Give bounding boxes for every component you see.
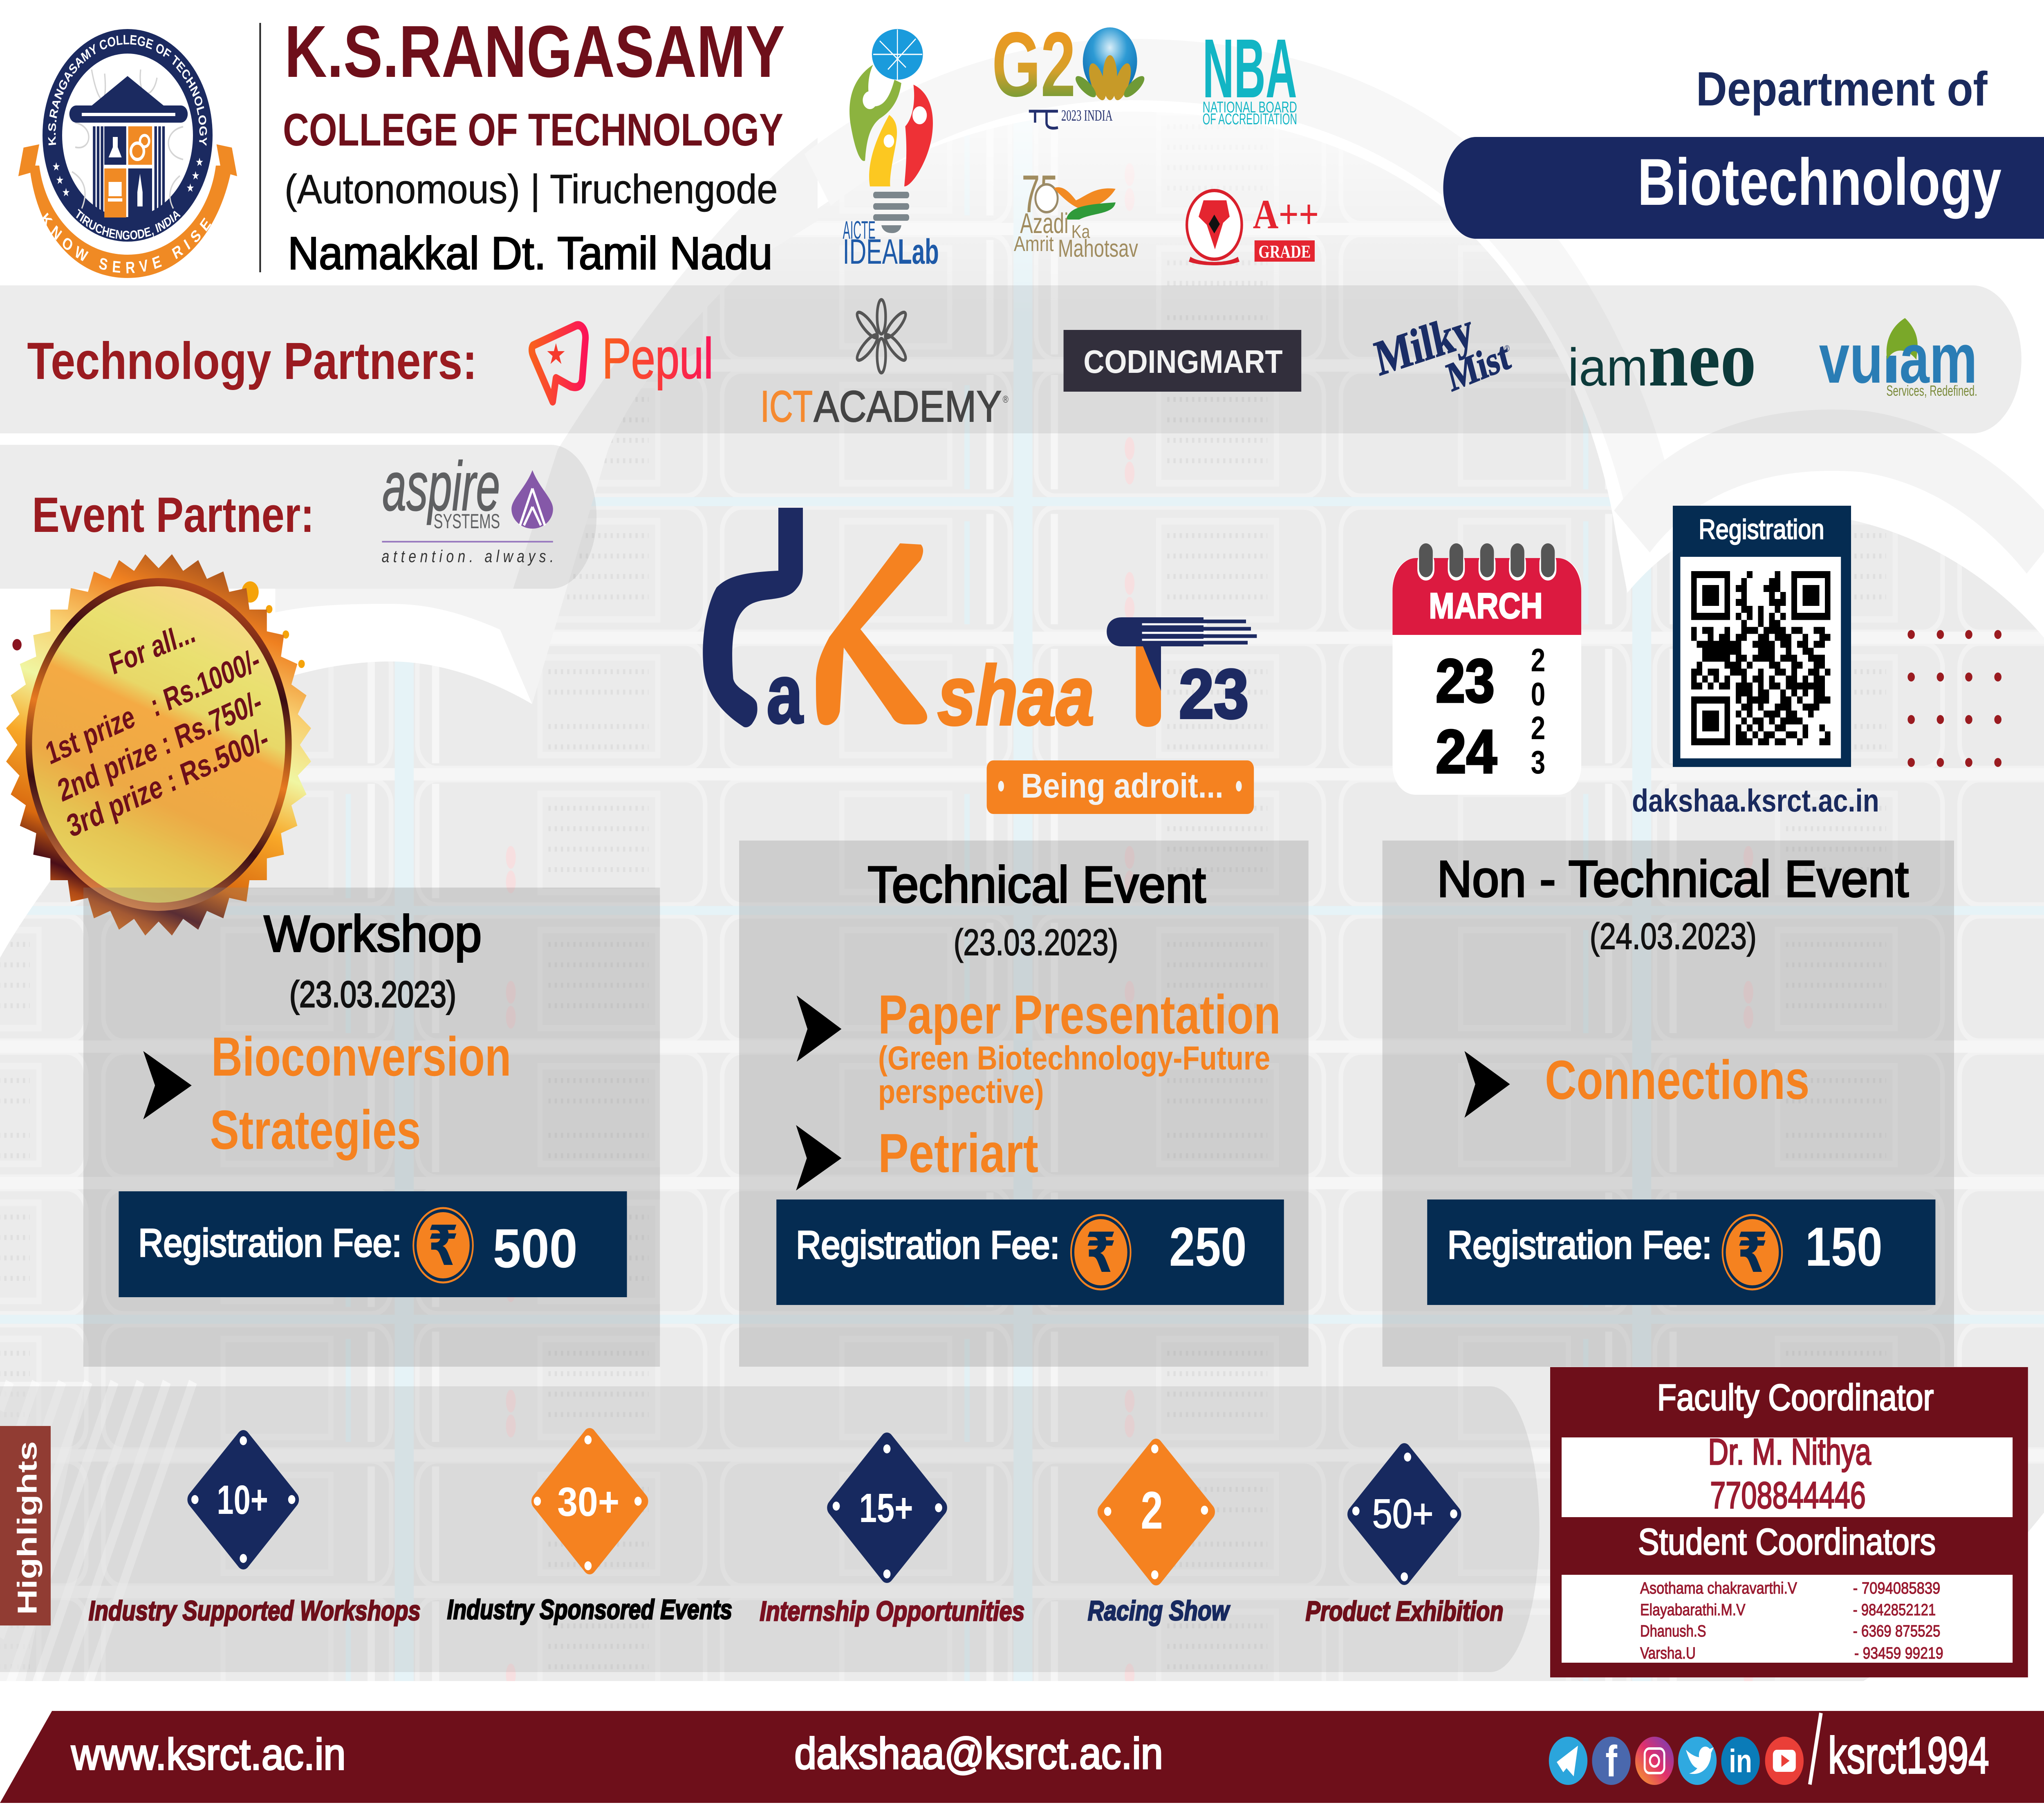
college logo: ★ xyxy=(56,174,64,187)
logo: Azadi Ka Amrit Mahotsav xyxy=(1014,164,1138,262)
highlight: internship opportunities xyxy=(760,1441,1024,1627)
social handle xyxy=(1810,1713,1989,1785)
logo: vuram: am xyxy=(1899,319,1977,398)
calendar: 2 xyxy=(1531,710,1545,747)
logo: Azadi Ka Amrit Mahotsav: Mahotsav xyxy=(1058,235,1138,262)
event logo: Dakshaa T23 xyxy=(703,508,1257,742)
decorative dot grid xyxy=(1907,630,2001,767)
student coordinators heading: Student Coordinators xyxy=(1638,1521,1936,1563)
registration QR card xyxy=(1673,506,1851,767)
logo: Codingmart xyxy=(1064,330,1301,392)
registration fee bar: 500 xyxy=(493,1217,578,1279)
event name xyxy=(210,1025,511,1161)
student contact list: - 93459 99219 xyxy=(1854,1644,1943,1662)
college logo: ★ xyxy=(62,186,70,199)
icon: linkedin xyxy=(1721,1737,1760,1785)
logo: NBA: OF ACCREDITATION xyxy=(1203,111,1297,128)
logo: ICT Academy: ACADEMY xyxy=(814,381,1002,431)
tagline: Being adroit xyxy=(987,760,1254,814)
band: event partner xyxy=(0,445,596,589)
logo: ICT Academy: ® xyxy=(1003,394,1009,405)
prize seal: For all... xyxy=(106,614,199,682)
student contact list: Asothama chakravarthi.V xyxy=(1640,1579,1797,1597)
registration fee bar: Registration Fee: xyxy=(796,1223,1060,1267)
logo: Azadi Ka Amrit Mahotsav: Amrit xyxy=(1014,232,1054,256)
logo: Milky Mist: Mist xyxy=(1442,332,1514,400)
calendar: 24 xyxy=(1436,717,1497,786)
logo: Aspire Systems xyxy=(382,448,554,566)
highlight: industry sponsored events: 30+ xyxy=(557,1480,619,1525)
highlights side label: Highlights xyxy=(12,1441,43,1615)
student contact list: Dhanush.S xyxy=(1640,1622,1706,1640)
arrow xyxy=(796,1125,841,1190)
student contact list xyxy=(1562,1575,2013,1663)
band: highlights xyxy=(0,1386,1540,1672)
heading: workshop: Workshop xyxy=(264,905,482,962)
highlight: product exhibition: 50+ xyxy=(1372,1491,1433,1537)
logo: NBA: NBA xyxy=(1203,22,1297,115)
logo: ICT Academy xyxy=(760,300,1009,431)
faculty contact xyxy=(1562,1431,2013,1517)
icon: facebook xyxy=(1592,1736,1631,1786)
highlight: racing show: Racing Show xyxy=(1088,1595,1230,1626)
logo: AICTE IDEA Lab xyxy=(843,29,939,271)
logo: Aspire Systems: SYSTEMS xyxy=(434,510,500,533)
logo: Aspire Systems: aspire xyxy=(382,448,500,525)
tagline: Being adroit: Being adroit... xyxy=(1021,767,1224,805)
highlight: internship opportunities: Internship Opportunities xyxy=(760,1596,1024,1627)
logo: Milky Mist: ® xyxy=(1504,344,1510,354)
event name: connections: Connections xyxy=(1545,1049,1809,1111)
registration QR card: Registration xyxy=(1699,514,1824,545)
logo: Milky Mist xyxy=(1370,301,1514,400)
arrow xyxy=(1464,1051,1510,1118)
student contact list: Varsha.U xyxy=(1640,1644,1696,1662)
band: technology partners xyxy=(0,285,2022,433)
calendar: 3 xyxy=(1531,744,1545,781)
department banner: Biotechnology xyxy=(1638,145,2001,219)
college logo xyxy=(18,29,237,278)
panel: workshop xyxy=(83,888,660,1367)
college logo: ★ xyxy=(186,182,195,195)
panel: technical event xyxy=(739,841,1309,1367)
registration fee bar xyxy=(776,1199,1284,1305)
registration fee bar: ₹ xyxy=(1737,1222,1768,1284)
icon: telegram xyxy=(1549,1737,1587,1785)
icon: twitter xyxy=(1678,1737,1717,1785)
footer bar xyxy=(0,1711,2044,1803)
student contact list: - 6369 875525 xyxy=(1853,1622,1940,1640)
prize seal: 1st prize : Rs.1000/- xyxy=(42,641,264,771)
college logo: ★ xyxy=(191,170,199,182)
calendar: 23 xyxy=(1436,646,1495,715)
highlight: industry sponsored events xyxy=(447,1435,732,1625)
department banner xyxy=(1443,137,2044,239)
logo: iamneo: neo xyxy=(1648,315,1756,403)
coordinators panel xyxy=(1550,1367,2028,1677)
logo: iamneo: iam xyxy=(1568,337,1648,397)
college logo: TIRUCHENGODE, INDIA xyxy=(73,206,182,242)
social handle: ksrct1994 xyxy=(1828,1727,1989,1784)
arrow xyxy=(143,1051,192,1119)
highlight: racing show: 2 xyxy=(1141,1480,1163,1540)
registration fee bar: ₹ xyxy=(1085,1222,1116,1284)
logo: Azadi Ka Amrit Mahotsav: 75 xyxy=(1022,164,1058,224)
icon: instagram xyxy=(1635,1737,1674,1785)
calendar: MARCH xyxy=(1429,585,1543,626)
department heading: Department of xyxy=(1696,62,1988,116)
heading: event partner: Event Partner: xyxy=(32,487,314,543)
prize seal: 3rd prize : Rs.500/- xyxy=(63,720,272,844)
college name xyxy=(283,10,785,279)
student contact list: Elayabarathi.M.V xyxy=(1640,1601,1746,1619)
highlight: product exhibition: Product Exhibition xyxy=(1306,1596,1504,1627)
logo: iamneo xyxy=(1568,315,1756,403)
faculty contact: Dr. M. Nithya xyxy=(1708,1431,1871,1473)
logo: Azadi Ka Amrit Mahotsav: Ka xyxy=(1071,221,1090,242)
registration fee bar: 250 xyxy=(1169,1215,1247,1278)
logo: Azadi Ka Amrit Mahotsav: Azadi xyxy=(1020,208,1069,239)
highlight: internship opportunities: 15+ xyxy=(859,1486,913,1531)
logo: G20 India xyxy=(992,13,1147,128)
highlight: industry supported workshops: Industry Supported Workshops xyxy=(89,1595,421,1626)
highlight: product exhibition xyxy=(1306,1451,1504,1627)
non-technical date: (24.03.2023) xyxy=(1590,916,1757,957)
logo: NAAC A++ grade: GRADE xyxy=(1258,241,1311,262)
website: www.ksrct.ac.in xyxy=(71,1729,346,1779)
heading: technology partners: Technology Partners: xyxy=(27,332,477,390)
workshop date: (23.03.2023) xyxy=(289,974,456,1015)
event name: Strategies xyxy=(210,1099,421,1161)
icon: youtube xyxy=(1765,1737,1804,1785)
faculty contact: 7708844446 xyxy=(1710,1474,1866,1516)
college name: COLLEGE OF TECHNOLOGY xyxy=(283,105,783,155)
college name: (Autonomous) | Tiruchengode xyxy=(285,167,778,212)
college logo: KNOW SERVE RISE xyxy=(38,209,217,277)
panel: non-technical event xyxy=(1383,841,1954,1367)
heading: non-technical event: Non - Technical Event xyxy=(1437,850,1909,908)
faculty coordinator heading: Faculty Coordinator xyxy=(1657,1377,1934,1418)
technical date: (23.03.2023) xyxy=(954,922,1118,963)
prize seal xyxy=(0,548,317,944)
highlight: industry supported workshops: 10+ xyxy=(217,1477,268,1523)
logo: NAAC A++ grade: A++ xyxy=(1253,191,1319,237)
logo: NAAC A++ grade xyxy=(1187,191,1319,265)
calendar xyxy=(1392,543,1581,795)
college logo: ★ xyxy=(195,156,204,169)
registration fee bar: Registration Fee: xyxy=(138,1221,401,1265)
registration website: dakshaa.ksrct.ac.in xyxy=(1632,782,1879,818)
event name: paper presentation: Paper Presentation xyxy=(878,983,1281,1045)
highlight: industry supported workshops xyxy=(89,1436,421,1626)
event name: petriart: Petriart xyxy=(878,1122,1038,1184)
logo: AICTE IDEA Lab: Lab xyxy=(898,232,939,271)
college name: K.S.RANGASAMY xyxy=(285,10,785,93)
icon: facebook: f xyxy=(1605,1736,1617,1786)
heading: technical event: Technical Event xyxy=(867,856,1206,913)
event logo: Dakshaa T23: 23 xyxy=(1179,655,1248,733)
event logo: Dakshaa T23: shaa xyxy=(938,649,1094,742)
logo: Pepul: ★ xyxy=(546,339,566,370)
logo: AICTE IDEA Lab: IDEA xyxy=(843,232,898,271)
logo: Pepul: Pepul xyxy=(602,326,713,390)
logo: vuram: Services, Redefined. xyxy=(1886,382,1977,399)
logo: NBA xyxy=(1203,22,1297,128)
highlight: industry sponsored events: Industry Sponsored Events xyxy=(447,1594,732,1625)
arrow xyxy=(797,995,841,1062)
email: dakshaa@ksrct.ac.in xyxy=(794,1729,1163,1778)
event name: paper presentation: perspective) xyxy=(878,1073,1044,1110)
registration fee bar xyxy=(1427,1199,1935,1305)
logo: G20 India: 2023 INDIA xyxy=(1061,107,1113,124)
student contact list: - 7094085839 xyxy=(1853,1579,1940,1597)
header divider xyxy=(259,23,261,272)
logo: Pepul xyxy=(532,325,713,401)
logo: G20 India: G2 xyxy=(992,13,1076,116)
event logo: Dakshaa T23: a xyxy=(766,648,804,741)
logo: vuram xyxy=(1819,318,1977,399)
student contact list: - 9842852121 xyxy=(1853,1601,1936,1619)
event name: paper presentation xyxy=(878,983,1281,1110)
event name: Bioconversion xyxy=(211,1025,511,1087)
college logo: K.S.RANGASAMY COLLEGE OF TECHNOLOGY xyxy=(46,32,209,146)
highlight: racing show xyxy=(1088,1444,1230,1626)
logo: vuram: vu xyxy=(1819,319,1883,398)
icon: linkedin: in xyxy=(1729,1743,1752,1780)
highlights side label xyxy=(0,1426,51,1625)
logo: Codingmart: CODINGMART xyxy=(1083,343,1283,380)
event name: paper presentation: (Green Biotechnology-Future xyxy=(878,1039,1270,1077)
calendar: 0 xyxy=(1531,676,1545,713)
logo: Milky Mist: Milky xyxy=(1370,301,1477,386)
prize seal: 2nd prize : Rs.750/- xyxy=(54,683,266,809)
logo: Aspire Systems: attention. always. xyxy=(382,547,554,566)
registration fee bar: 150 xyxy=(1805,1215,1883,1278)
college logo: ★ xyxy=(52,161,61,173)
registration fee bar: Registration Fee: xyxy=(1448,1223,1712,1267)
logo: AICTE IDEA Lab: AICTE xyxy=(843,216,876,244)
registration fee bar: ₹ xyxy=(428,1215,459,1277)
registration fee bar xyxy=(119,1191,627,1297)
logo: NBA: NATIONAL BOARD xyxy=(1203,99,1297,116)
calendar: 2 xyxy=(1531,642,1545,679)
college name: Namakkal Dt. Tamil Nadu xyxy=(288,228,773,279)
logo: ICT Academy: ICT xyxy=(760,381,813,431)
